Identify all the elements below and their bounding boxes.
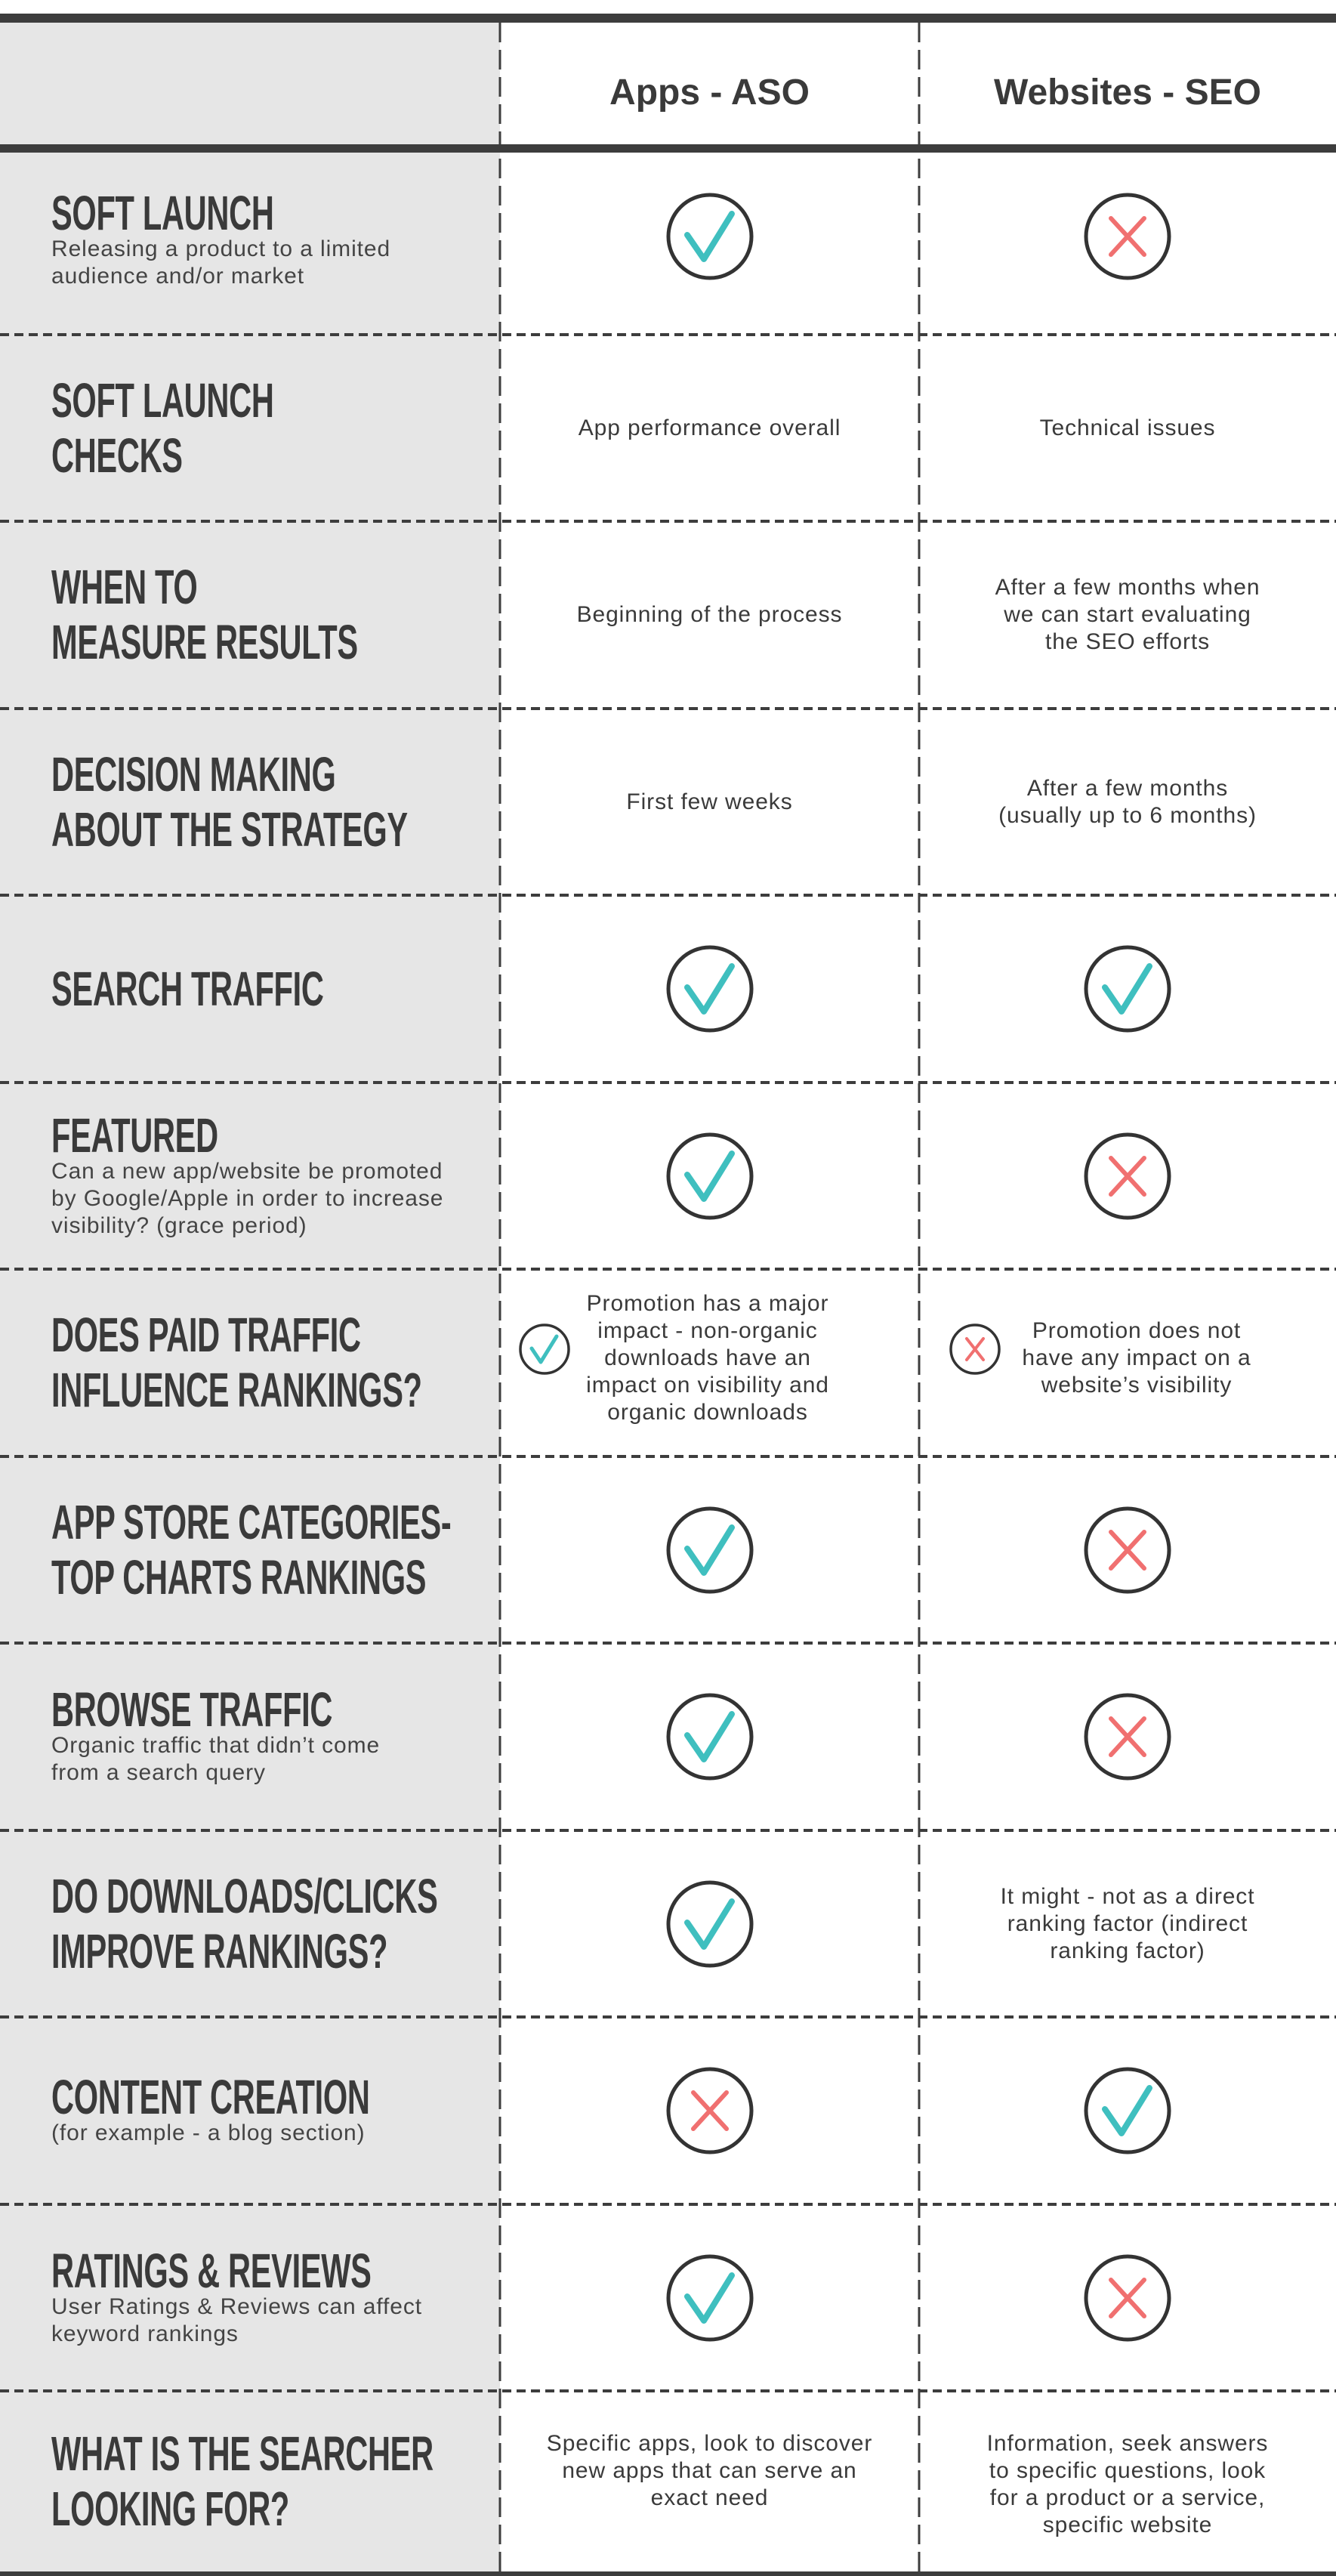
label	[51, 373, 274, 482]
label: BROWSE TRAFFIC	[51, 1682, 332, 1737]
label: by Google/Apple in order to increase	[51, 1186, 443, 1210]
text: websites: Information, seek answers	[987, 2431, 1268, 2456]
label: User Ratings & Reviews can affect	[51, 2293, 422, 2319]
row: app store categories	[51, 1494, 1171, 1605]
label: WHEN TO	[51, 560, 197, 614]
label	[51, 746, 408, 857]
text: websites	[995, 575, 1260, 654]
text: websites: specific website	[1043, 2513, 1212, 2537]
icon: cross	[1085, 193, 1171, 280]
label	[0, 2204, 500, 2391]
row: when to measure	[51, 560, 1260, 669]
text: websites: It might - not as a direct	[1001, 1884, 1254, 1908]
row: browse traffic	[51, 1682, 1171, 1785]
label: from a search query	[51, 1760, 266, 1785]
label: RATINGS & REVIEWS	[51, 2244, 372, 2298]
header: Websites - SEO: Websites - SEO	[994, 73, 1261, 113]
text: apps: App performance overall	[579, 415, 841, 440]
icon: check	[666, 1506, 754, 1594]
text: websites: ranking factor (indirect	[1007, 1911, 1248, 1935]
icon: check	[666, 946, 754, 1032]
icon: check	[666, 1694, 754, 1780]
text: websites: Technical issues	[1040, 415, 1215, 440]
label: LOOKING FOR?	[51, 2481, 289, 2535]
label: DOES PAID TRAFFIC	[51, 1308, 361, 1362]
label	[51, 1107, 443, 1237]
row: soft launch	[51, 186, 1171, 289]
text: websites: ranking factor)	[1050, 1938, 1205, 1963]
text: apps	[500, 2391, 919, 2571]
text: websites	[919, 2391, 1336, 2571]
icon: cross	[1085, 1506, 1171, 1594]
text: websites: Promotion does not	[1032, 1318, 1241, 1343]
icon: cross	[1085, 1133, 1171, 1219]
icon: check	[500, 2204, 919, 2391]
label: APP STORE CATEGORIES-	[51, 1494, 451, 1549]
icon: cross	[1085, 1694, 1171, 1780]
text: apps: organic downloads	[607, 1400, 808, 1425]
row: paid traffic	[51, 1291, 1251, 1425]
label: DO DOWNLOADS/CLICKS	[51, 1869, 437, 1923]
icon: check	[666, 1133, 754, 1219]
label: SEARCH TRAFFIC	[51, 961, 324, 1015]
label: ABOUT THE STRATEGY	[51, 802, 408, 857]
label: WHAT IS THE SEARCHER	[51, 2426, 434, 2481]
text: apps: impact - non-organic	[597, 1318, 818, 1343]
text: websites	[1022, 1318, 1251, 1398]
text: apps: Specific apps, look to discover	[547, 2431, 872, 2456]
label	[0, 2391, 500, 2571]
text: apps: Beginning of the process	[577, 602, 842, 627]
icon: cross	[500, 2017, 919, 2204]
text: websites: After a few months when	[995, 575, 1260, 600]
label: DECISION MAKING	[51, 746, 335, 801]
text: apps: First few weeks	[626, 789, 793, 814]
header: Apps - ASO: Apps - ASO	[609, 73, 810, 113]
label	[51, 186, 390, 289]
label: FEATURED	[51, 1107, 218, 1162]
text: websites: have any impact on a	[1022, 1345, 1251, 1370]
label	[51, 1308, 422, 1417]
label: visibility? (grace period)	[51, 1213, 307, 1237]
text: websites: the SEO efforts	[1045, 629, 1210, 654]
text: websites: for a product or a service,	[990, 2485, 1265, 2510]
text: apps: new apps that can serve an	[562, 2458, 857, 2483]
label: IMPROVE RANKINGS?	[51, 1923, 387, 1978]
text: websites: After a few months	[1027, 775, 1228, 801]
text: apps: impact on visibility and	[586, 1373, 829, 1398]
text: websites: website’s visibility	[1041, 1373, 1232, 1398]
label: Organic traffic that didn’t come	[51, 1733, 380, 1758]
label: keyword rankings	[51, 2321, 239, 2346]
icon: check	[666, 193, 754, 280]
label: MEASURE RESULTS	[51, 615, 358, 669]
row: featured	[51, 1107, 1171, 1237]
text: apps: Promotion has a major	[587, 1291, 828, 1316]
row: ratings & reviews	[0, 2204, 1336, 2391]
text: websites: we can start evaluating	[1004, 602, 1251, 627]
label	[51, 1682, 380, 1785]
icon: small check	[519, 1324, 570, 1375]
icon: check	[666, 1881, 754, 1967]
text: websites	[1001, 1884, 1254, 1963]
label: TOP CHARTS RANKINGS	[51, 1550, 426, 1605]
row: searcher	[0, 2391, 1336, 2571]
label	[51, 1494, 451, 1605]
label: Releasing a product to a limited	[51, 236, 390, 261]
text: websites	[998, 775, 1257, 828]
icon: small cross	[949, 1324, 1001, 1375]
row: search traffic	[51, 946, 1171, 1032]
row: soft launch checks	[51, 373, 1215, 482]
row: content creation	[51, 2067, 1171, 2154]
label: CONTENT CREATION	[51, 2070, 370, 2124]
label: SOFT LAUNCH	[51, 373, 274, 428]
row: decision making	[51, 746, 1257, 857]
icon: check	[1085, 946, 1171, 1032]
text: websites: (usually up to 6 months)	[998, 802, 1257, 828]
label: Can a new app/website be promoted	[51, 1159, 443, 1183]
label: INFLUENCE RANKINGS?	[51, 1363, 422, 1417]
icon: check	[919, 2017, 1336, 2204]
icon: cross	[919, 2204, 1336, 2391]
label	[51, 560, 358, 669]
label: audience and/or market	[51, 263, 304, 289]
text: apps	[586, 1291, 829, 1425]
text: websites: to specific questions, look	[989, 2458, 1266, 2483]
label: SOFT LAUNCH	[51, 186, 274, 240]
label	[51, 1869, 437, 1978]
label: CHECKS	[51, 428, 183, 482]
text: apps: exact need	[651, 2485, 768, 2510]
text: apps: downloads have an	[604, 1345, 811, 1370]
left column background	[0, 23, 500, 2573]
row: downloads/clicks	[51, 1869, 1254, 1978]
label: (for example - a blog section)	[51, 2120, 366, 2145]
